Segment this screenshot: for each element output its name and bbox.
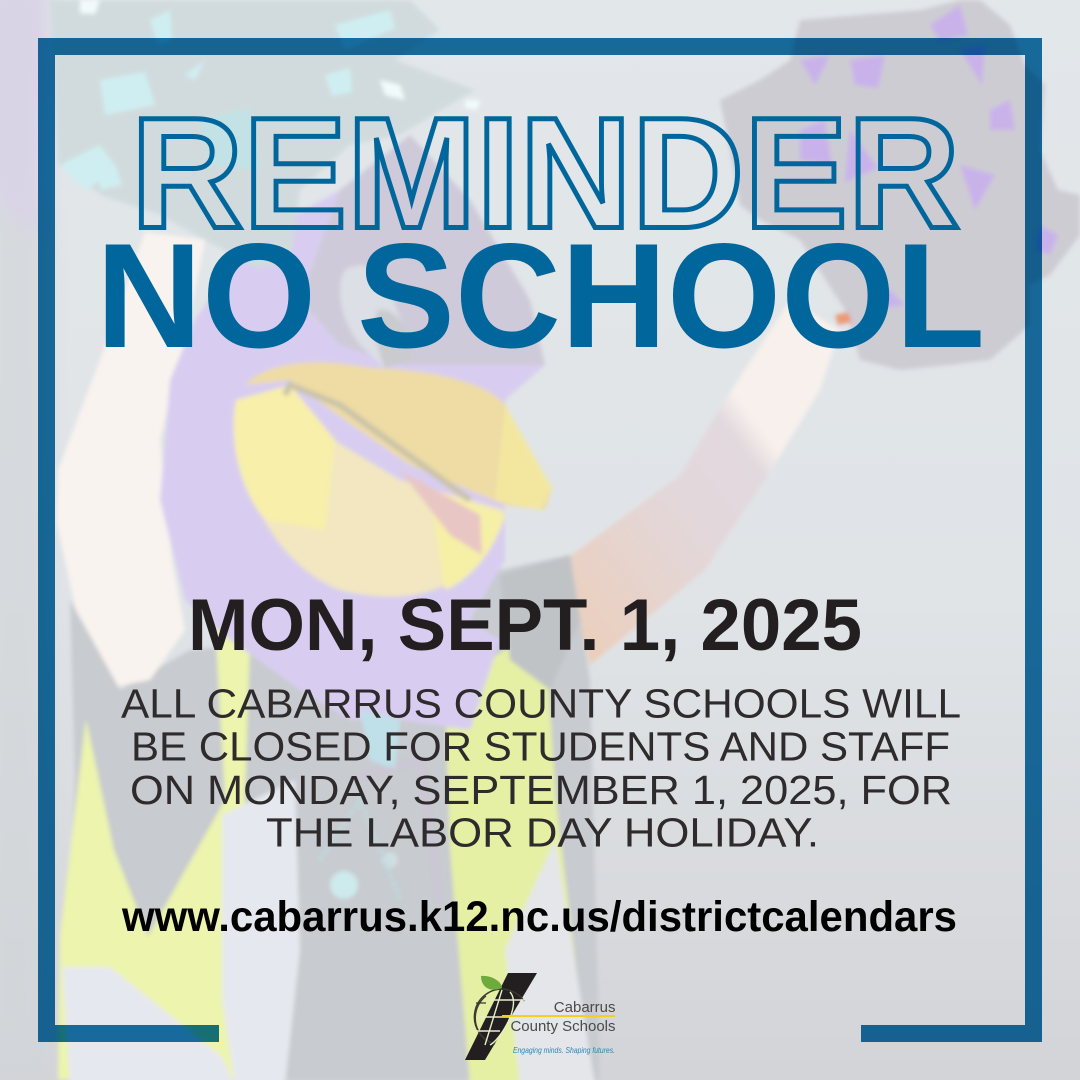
- left arm: [56, 232, 205, 686]
- title: reminder outline: REMINDER: [131, 86, 960, 262]
- icon: leaf: [481, 976, 502, 990]
- reflective band centre: [222, 780, 300, 1080]
- closure notice text: [121, 680, 961, 856]
- beads: [330, 871, 358, 899]
- closure notice text: ON MONDAY, SEPTEMBER 1, 2025, FOR: [130, 767, 952, 813]
- teal pompom: [50, 0, 475, 268]
- yellow rule: [502, 1015, 615, 1017]
- fur around head and neck: [160, 135, 545, 730]
- purple edge at top left: [0, 0, 50, 240]
- lower beak: [240, 420, 505, 597]
- right arm: [565, 300, 840, 665]
- torso: [60, 555, 600, 1080]
- icon: slanted seven: [465, 973, 537, 1060]
- logo tagline: Engaging minds. Shaping futures.: [513, 1046, 615, 1055]
- date heading: MON, SEPT. 1, 2025: [188, 585, 862, 666]
- vest right panel: [445, 640, 590, 1080]
- website url: www.cabarrus.k12.nc.us/districtcalendars: [121, 893, 957, 941]
- logo: Cabarrus County Schools: [465, 973, 616, 1060]
- reflective stripe left: [62, 967, 235, 1080]
- closure notice text: BE CLOSED FOR STUDENTS AND STAFF: [131, 724, 950, 770]
- dark shoulder on right: [500, 555, 580, 690]
- tongue: [400, 470, 482, 555]
- upper beak: [245, 362, 552, 510]
- beak line: [285, 385, 470, 500]
- closure notice text: ALL CABARRUS COUNTY SCHOOLS WILL: [121, 680, 961, 726]
- eye: [340, 265, 410, 368]
- icon: globe: [473, 989, 524, 1045]
- logo name: Cabarrus: [554, 999, 616, 1016]
- purple pompom: [720, 0, 1080, 370]
- vest left panel: [58, 590, 250, 1080]
- closure notice text: THE LABOR DAY HOLIDAY.: [266, 810, 819, 856]
- logo name second line: County Schools: [510, 1018, 616, 1035]
- title: no school: NO SCHOOL: [96, 212, 985, 379]
